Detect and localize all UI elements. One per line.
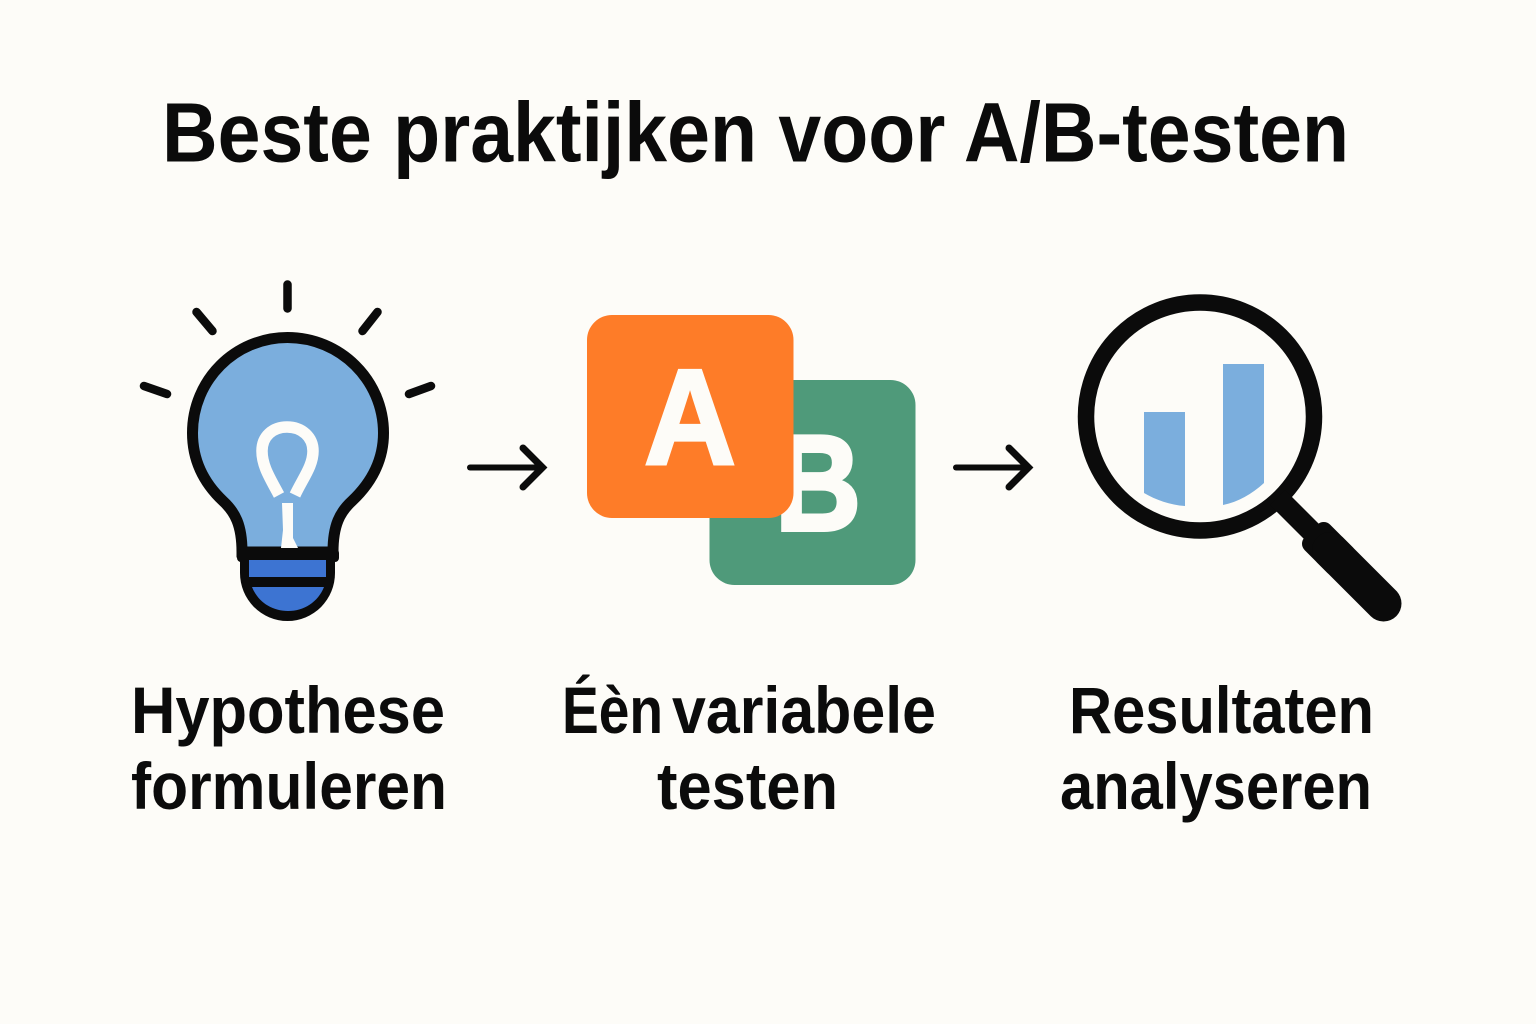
- label: een variabele testen: variabele: [672, 673, 936, 747]
- label: hypothese formuleren: formuleren: [131, 749, 447, 823]
- label: resultaten analyseren: Resultaten: [1069, 673, 1374, 747]
- label: een variabele testen: Éèn: [562, 673, 663, 747]
- chart bars: [1144, 364, 1264, 506]
- filament: [262, 427, 313, 548]
- label: hypothese formuleren: [131, 673, 447, 823]
- title: Beste praktijken voor A/B-testen: [162, 86, 1349, 180]
- bulb base: [237, 549, 339, 621]
- handle: [1270, 490, 1384, 604]
- bulb glass: [192, 338, 384, 552]
- lens ring: [1086, 302, 1314, 530]
- card A: [587, 315, 794, 518]
- label: resultaten analyseren: analyseren: [1060, 749, 1372, 823]
- card A: A: [644, 341, 736, 493]
- icon: magnifying glass with bar chart: [1086, 302, 1384, 604]
- card B: [710, 380, 916, 585]
- icon: light bulb: [144, 284, 431, 621]
- label: resultaten analyseren: [1060, 673, 1374, 823]
- label: een variabele testen: testen: [657, 749, 838, 823]
- icon: A/B cards: [587, 315, 916, 585]
- arrow: test to analysis: [956, 448, 1028, 487]
- label: een variabele testen: [562, 673, 936, 823]
- arrow: hypothesis to test: [470, 448, 542, 487]
- label: hypothese formuleren: Hypothese: [131, 673, 445, 747]
- bulb rays: [144, 284, 431, 394]
- card B: B: [775, 407, 861, 559]
